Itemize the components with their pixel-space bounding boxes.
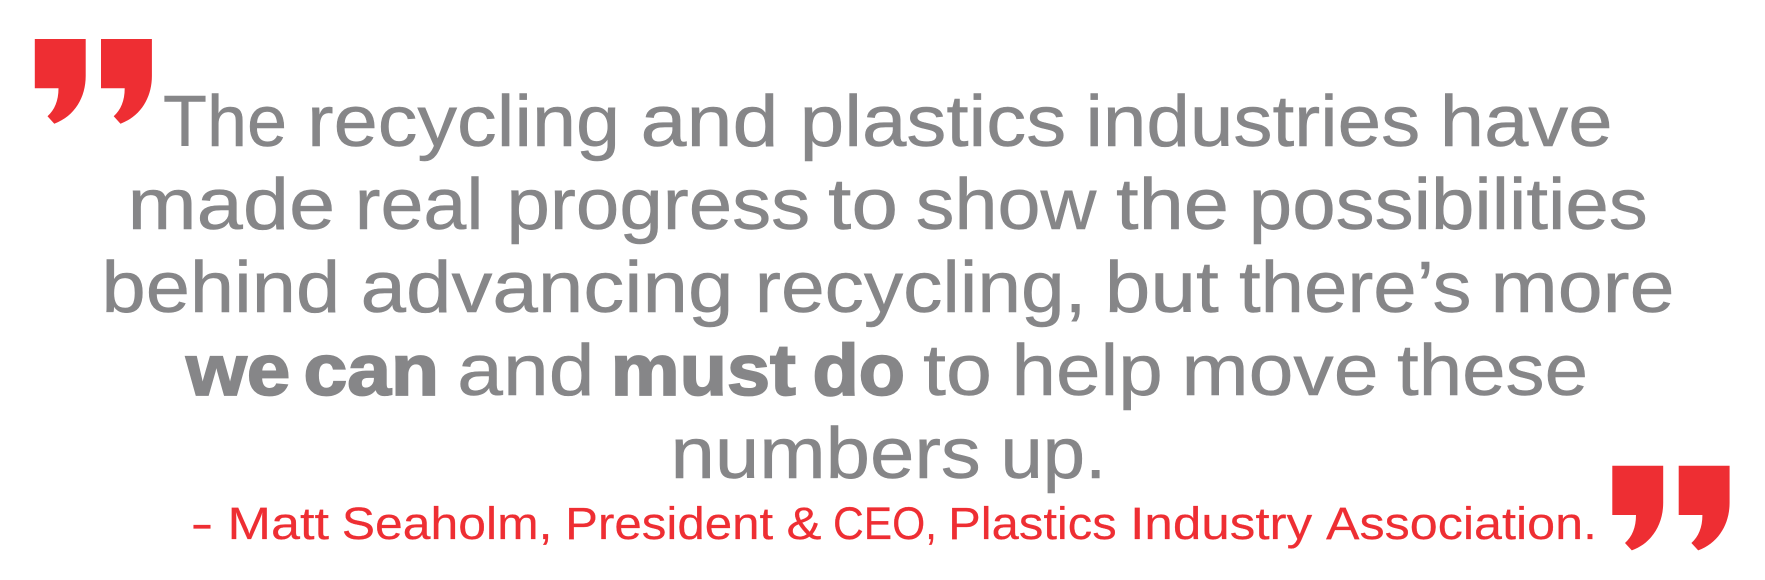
quote line 3: behind: [102, 248, 340, 328]
quote line 3: recycling,: [755, 248, 1086, 328]
quote line 5: numbers: [670, 414, 981, 494]
attribution: [190, 498, 1597, 549]
quote line 3: advancing: [360, 248, 734, 328]
quote text: [102, 82, 1674, 494]
quote line 3: there’s: [1239, 248, 1472, 328]
quote line 5: [670, 414, 1106, 494]
quote line 4 with bold emphasis: can: [304, 331, 439, 411]
quote line 5: up.: [1000, 414, 1106, 494]
quote line 1: [163, 82, 1612, 162]
icon: opening quotation marks: [35, 39, 152, 124]
attribution: Seaholm,: [342, 498, 552, 549]
quote line 2: progress: [506, 165, 810, 245]
quote line 2: to: [828, 165, 898, 245]
quote line 3: but: [1105, 248, 1219, 328]
quote line 2: the: [1116, 165, 1229, 245]
attribution: &: [786, 498, 822, 549]
quote line 1: industries: [1086, 82, 1420, 162]
quote line 4 with bold emphasis: and: [457, 331, 594, 411]
attribution: Association.: [1326, 498, 1597, 549]
quote line 1: have: [1440, 82, 1612, 162]
quote line 1: plastics: [800, 82, 1066, 162]
quote line 4 with bold emphasis: we: [185, 331, 290, 411]
quote line 1: The: [163, 82, 287, 162]
attribution: President: [565, 498, 774, 549]
quote line 2: made: [128, 165, 335, 245]
quote line 4 with bold emphasis: help: [1012, 331, 1163, 411]
quote line 3: more: [1490, 248, 1674, 328]
quote line 1: and: [640, 82, 778, 162]
quote line 4 with bold emphasis: move: [1182, 331, 1378, 411]
quote line 4 with bold emphasis: to: [923, 331, 992, 411]
quote line 4 with bold emphasis: must: [611, 331, 796, 411]
attribution: Matt: [228, 498, 330, 549]
quote line 4 with bold emphasis: [185, 331, 1588, 411]
quote line 2: possibilities: [1249, 165, 1648, 245]
icon: closing quotation marks: [1612, 466, 1730, 550]
attribution: -: [190, 498, 214, 549]
quote line 2: show: [916, 165, 1097, 245]
quote line 3: [102, 248, 1674, 328]
attribution: CEO,: [833, 498, 937, 549]
quote line 2: real: [355, 165, 484, 245]
quote line 1: recycling: [307, 82, 620, 162]
quote line 2: [128, 165, 1648, 245]
attribution: Industry: [1130, 498, 1313, 549]
quote line 4 with bold emphasis: do: [812, 331, 905, 411]
quote line 4 with bold emphasis: these: [1397, 331, 1588, 411]
attribution: Plastics: [948, 498, 1117, 549]
